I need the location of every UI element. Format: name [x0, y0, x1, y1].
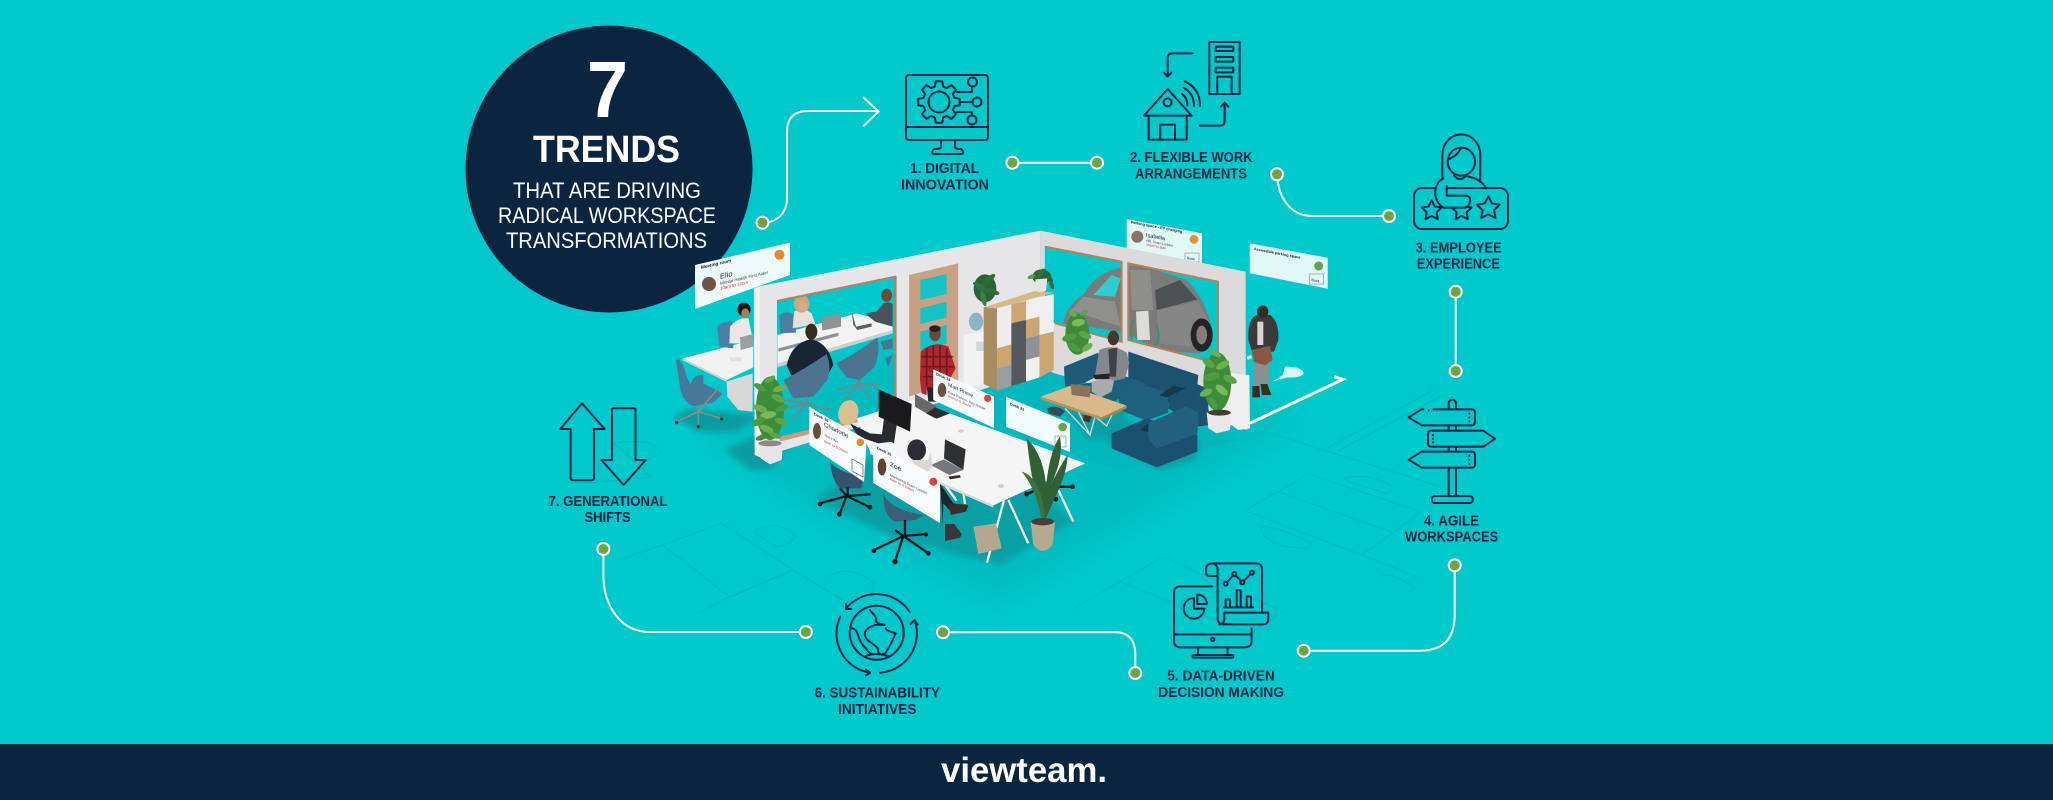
label: 5. Data-Driven Decision Making: 5. DATA-DRIVEN — [1167, 668, 1275, 684]
connector 2 to 3 — [1271, 168, 1395, 222]
floating booking card: meeting room — [695, 242, 790, 309]
desk booking card: Zoe: Desk 15 — [877, 445, 892, 457]
person at left table — [717, 303, 753, 350]
laptops in glass room — [822, 312, 872, 331]
label: 6. Sustainability Initiatives: 6. SUSTAINABILITY — [815, 686, 940, 702]
floating booking card: parking space EV: 10am to 3pm — [1146, 243, 1166, 251]
front desk group — [818, 389, 1085, 564]
label: 2. Flexible Work Arrangements — [1130, 150, 1253, 182]
connector 5 to 6 — [937, 626, 1141, 679]
tote bag — [973, 523, 1002, 554]
title badge: TRENDS — [533, 129, 680, 171]
desk booking card: Zoe: Zoë — [890, 461, 901, 474]
meeting room table, chairs and people — [675, 289, 893, 428]
glass room frame edge — [895, 276, 897, 413]
title badge: 7 — [587, 45, 628, 134]
lockers — [984, 291, 1054, 391]
floating booking card: accessible parking — [1250, 243, 1328, 289]
floating booking card: parking space EV: Isabella — [1146, 233, 1166, 242]
label: 1. Digital Innovation — [901, 161, 989, 194]
monitor — [879, 389, 912, 443]
connector 1 to 2 — [1006, 157, 1103, 169]
meeting chairs — [783, 337, 893, 419]
label: 3. Employee Experience: 3. EMPLOYEE — [1416, 240, 1502, 256]
desk booking card: Desk 21 — [1006, 397, 1070, 452]
desk booking card: Matt — [933, 369, 994, 428]
label: 4. Agile Workspaces: 4. AGILE — [1424, 514, 1479, 530]
desk booking card: Charlotte — [809, 407, 867, 482]
floor plan outlines — [583, 390, 1443, 633]
desk booking card: Matt: 8am to 5.30pm — [948, 394, 971, 408]
floating booking card: parking space EV: HR, Team Leader — [1146, 239, 1174, 248]
desk chairs — [818, 406, 1075, 564]
trend 5: data-driven decision making icon — [1174, 563, 1268, 658]
title badge: THAT ARE DRIVING — [513, 178, 701, 203]
label: 3. Employee Experience: EXPERIENCE — [1417, 256, 1500, 272]
connector 4 to 5 — [1298, 559, 1461, 657]
label: 7. Generational Shifts: SHIFTS — [584, 510, 631, 526]
potted palm — [1022, 437, 1068, 551]
label: 1. Digital Innovation: 1. DIGITAL — [910, 161, 979, 177]
wall end stub — [1220, 373, 1250, 430]
corner plant — [1199, 348, 1238, 433]
man in red plaid shirt — [920, 325, 956, 402]
label: 7. Generational Shifts: 7. GENERATIONAL — [548, 494, 668, 510]
label: 4. Agile Workspaces — [1405, 514, 1499, 546]
floating booking card: parking space EV: Parking space - EV charging — [1131, 220, 1183, 234]
trend 3: employee experience icon — [1414, 134, 1508, 229]
suited man — [787, 324, 833, 380]
plant by window — [1061, 308, 1094, 355]
floor shading — [672, 300, 1300, 600]
seated man with tablet — [1092, 331, 1129, 397]
desk legs — [945, 485, 1073, 563]
plants on lockers — [972, 267, 1055, 307]
label: 2. Flexible Work Arrangements: 2. FLEXIBLE WORK — [1130, 150, 1253, 166]
floating booking card: accessible parking: Book — [1312, 278, 1320, 284]
woman behind table — [779, 295, 815, 333]
footer bar with logo — [0, 744, 2053, 800]
desk booking card: Matt: Matt Rhew — [948, 382, 973, 399]
title badge: RADICAL WORKSPACE — [498, 203, 716, 228]
label: 7. Generational Shifts — [548, 494, 668, 526]
label: 4. Agile Workspaces: WORKSPACES — [1405, 530, 1499, 546]
title badge: TRANSFORMATIONS — [506, 228, 707, 253]
trend 4: agile workspaces signpost icon — [1409, 400, 1495, 503]
label: 2. Flexible Work Arrangements: ARRANGEMENTS — [1135, 166, 1247, 182]
label: 1. Digital Innovation: INNOVATION — [901, 178, 989, 194]
trend 2: flexible work icon — [1144, 42, 1240, 140]
label: 6. Sustainability Initiatives — [815, 686, 940, 718]
office illustration — [672, 219, 1343, 600]
label: 5. Data-Driven Decision Making — [1158, 668, 1284, 701]
front wall with window — [754, 231, 1040, 457]
man with laptop — [865, 289, 893, 327]
desk booking card: Desk 21: Desk 21 — [1010, 401, 1025, 412]
title badge — [466, 26, 752, 312]
arrow from title to trend 1 — [756, 97, 878, 229]
desk booking card: Charlotte: 9am to 5.30pm — [824, 439, 848, 455]
laptops — [915, 394, 966, 479]
coffee table — [1041, 384, 1127, 435]
floating booking card: parking space EV: Book — [1187, 256, 1195, 262]
desk booking card: Charlotte: Charlotte — [824, 421, 849, 440]
floating booking card: accessible parking: Accessible parking space — [1254, 247, 1300, 260]
desk workers — [835, 398, 968, 541]
water dispenser — [964, 313, 989, 387]
desk booking card: Charlotte: Desk 16 — [814, 411, 829, 423]
floating booking card: meeting room: 10am to 12pm — [720, 279, 748, 291]
floating booking card: meeting room: Mental Health First Aider — [720, 270, 769, 286]
floating booking card: parking space EV — [1127, 219, 1202, 275]
electric car — [1063, 265, 1213, 353]
glass room table — [777, 313, 893, 367]
label: 3. Employee Experience — [1416, 240, 1502, 272]
connector 3 to 4 — [1450, 286, 1462, 377]
label: 6. Sustainability Initiatives: INITIATIVES — [838, 702, 917, 718]
floating booking card: meeting room: Elio — [720, 269, 733, 281]
desk booking card: Matt: Data Partner, Key Holder — [948, 390, 986, 412]
trend 6: sustainability globe icon — [836, 594, 918, 676]
floating booking card: meeting room: Meeting room — [701, 258, 731, 270]
desk booking card: Zoe: Marketing Team Leader — [890, 473, 928, 496]
left chair — [675, 360, 723, 428]
blue sofa — [1064, 352, 1209, 467]
desk booking card: Zoe — [873, 443, 940, 523]
connector 6 to 7 — [597, 543, 812, 638]
trend 7: generational shifts arrows icon — [560, 403, 646, 485]
parking bay line and wheelchair sign — [1247, 357, 1343, 424]
desk booking card: Matt: Desk 14 — [936, 371, 951, 383]
rear wall with windows — [1040, 231, 1248, 430]
label: 5. Data-Driven Decision Making: DECISION MAKING — [1158, 685, 1284, 701]
desk top — [857, 400, 1085, 508]
standing person with bag — [1248, 305, 1278, 397]
wooden door — [909, 263, 958, 397]
desk booking card: Zoe: 8am to 4.30pm — [890, 477, 914, 493]
footer bar with logo: viewteam. — [941, 751, 1107, 790]
desk booking card: Charlotte: The Hive — [824, 433, 838, 444]
left table — [683, 340, 753, 412]
left plant — [750, 374, 790, 464]
trend 1: digital innovation icon — [906, 75, 988, 154]
